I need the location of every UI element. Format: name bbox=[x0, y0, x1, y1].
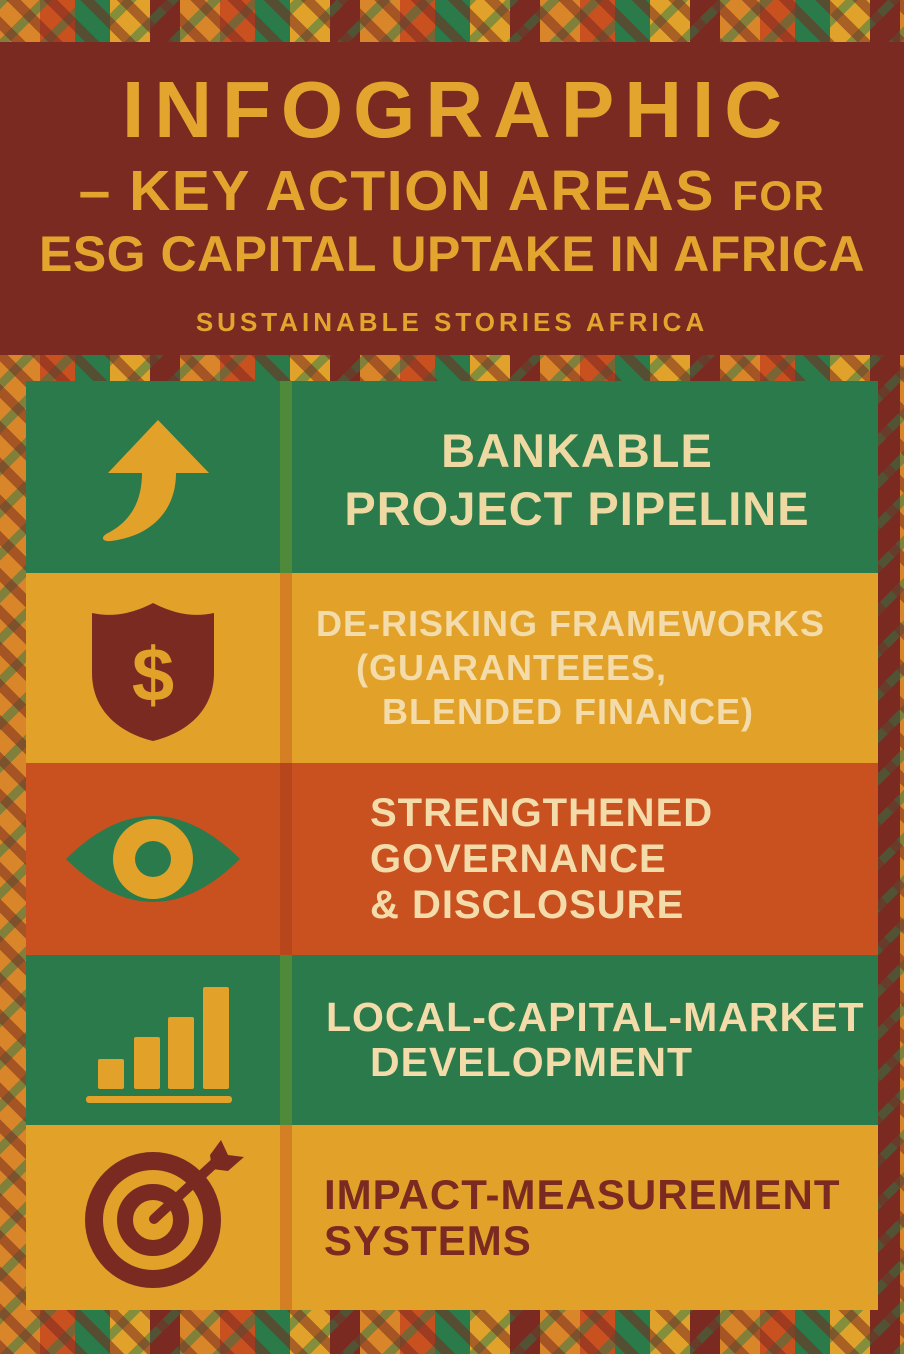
title heading: INFOGRAPHIC bbox=[122, 65, 792, 154]
text: GOVERNANCE bbox=[370, 837, 667, 881]
icon: eye bbox=[66, 816, 240, 902]
text: & DISCLOSURE bbox=[370, 883, 684, 927]
text: STRENGTHENED bbox=[370, 791, 713, 835]
text bbox=[370, 791, 713, 927]
text: DE-RISKING FRAMEWORKS bbox=[316, 603, 825, 644]
text bbox=[324, 1170, 841, 1264]
text: BLENDED FINANCE) bbox=[382, 691, 754, 732]
row: bankable project pipeline bbox=[26, 381, 878, 573]
title block bbox=[0, 42, 904, 355]
text bbox=[326, 994, 864, 1085]
text: DEVELOPMENT bbox=[370, 1039, 693, 1085]
text bbox=[316, 603, 825, 732]
text bbox=[344, 424, 810, 535]
row: local capital market bbox=[26, 955, 878, 1125]
subtitle heading: – KEY ACTION AREAS FOR bbox=[79, 159, 825, 223]
icon: shield dollar: $ bbox=[132, 633, 174, 718]
row: governance bbox=[26, 763, 878, 955]
subtitle heading: ESG CAPITAL UPTAKE IN AFRICA bbox=[39, 226, 865, 282]
text: LOCAL-CAPITAL-MARKET bbox=[326, 994, 864, 1040]
icon: curved arrow bbox=[103, 420, 209, 542]
text: BANKABLE bbox=[441, 424, 713, 477]
row: impact measurement bbox=[26, 1125, 878, 1310]
subtitle heading bbox=[39, 159, 865, 282]
icon: bar chart bbox=[86, 987, 232, 1103]
text: SYSTEMS bbox=[324, 1216, 532, 1264]
icon: target bbox=[85, 1140, 244, 1288]
icon: shield dollar bbox=[92, 603, 214, 741]
text: PROJECT PIPELINE bbox=[344, 482, 810, 535]
text: IMPACT-MEASUREMENT bbox=[324, 1170, 841, 1218]
row: de-risking bbox=[26, 573, 878, 763]
byline: SUSTAINABLE STORIES AFRICA bbox=[196, 307, 708, 337]
text: (GUARANTEEES, bbox=[356, 647, 667, 688]
panel: action areas bbox=[26, 381, 878, 1310]
